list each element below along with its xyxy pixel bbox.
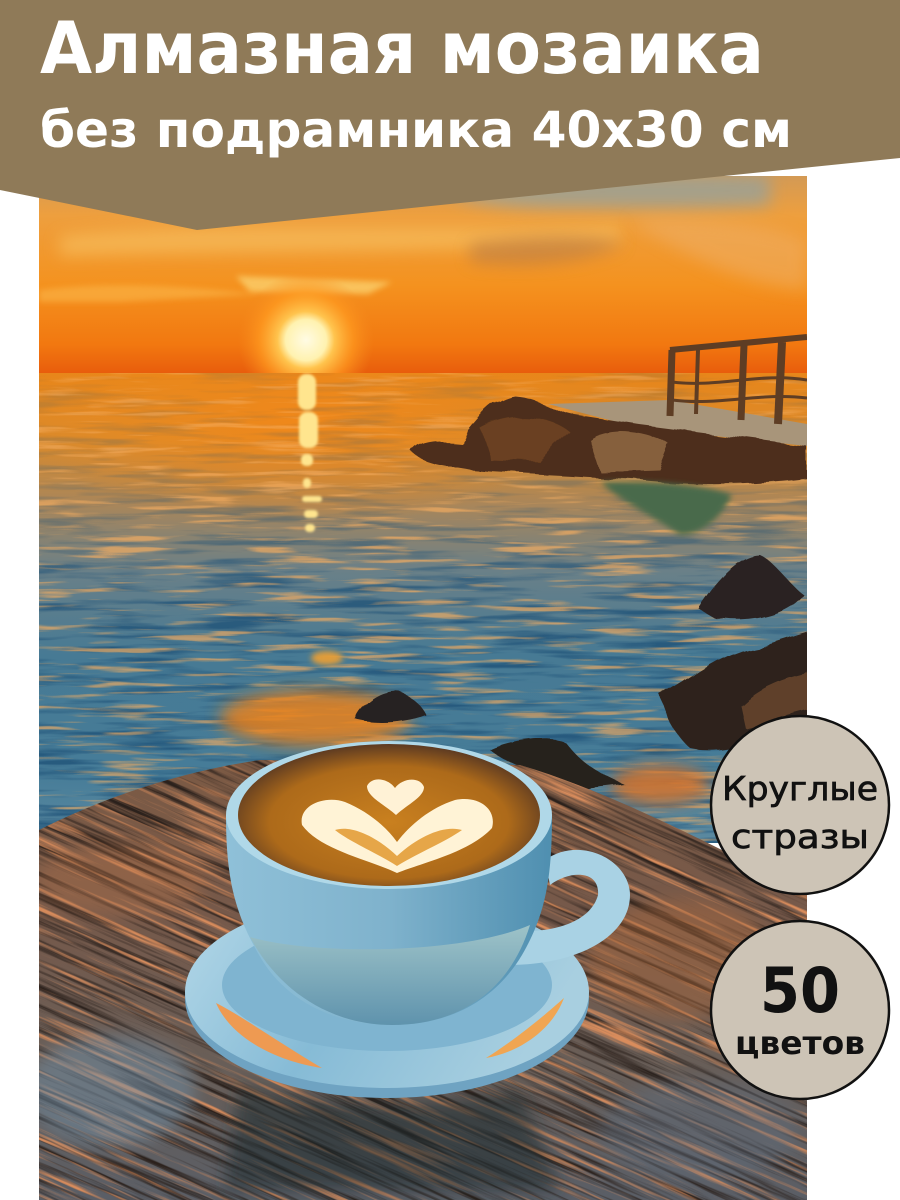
title: Алмазная мозаика <box>40 6 764 90</box>
latte art heart <box>302 779 493 873</box>
sea <box>39 373 807 843</box>
rocks <box>356 396 812 790</box>
saucer <box>185 924 589 1098</box>
sun reflection <box>298 374 322 532</box>
cup rim <box>226 741 552 889</box>
badge: round rhinestones: стразы <box>731 817 869 856</box>
badge: 50 colours: цветов <box>735 1024 865 1062</box>
cup handle <box>505 850 630 965</box>
subtitle: без подрамника 40х30 см <box>40 101 792 159</box>
cup body <box>226 815 552 1025</box>
photo: coffee cup on a table at sunset over the sea <box>10 174 812 1200</box>
header banner <box>0 0 900 230</box>
warm reflection near table <box>220 651 710 805</box>
sky <box>39 174 807 374</box>
badge: round rhinestones <box>711 716 889 894</box>
pier with railing <box>548 337 807 446</box>
coffee surface <box>238 744 540 886</box>
wooden table <box>25 760 807 1200</box>
badge: round rhinestones: Круглые <box>722 769 878 808</box>
badge: 50 colours: 50 <box>760 954 840 1027</box>
badge: 50 colours <box>711 921 889 1099</box>
sun <box>247 279 365 373</box>
